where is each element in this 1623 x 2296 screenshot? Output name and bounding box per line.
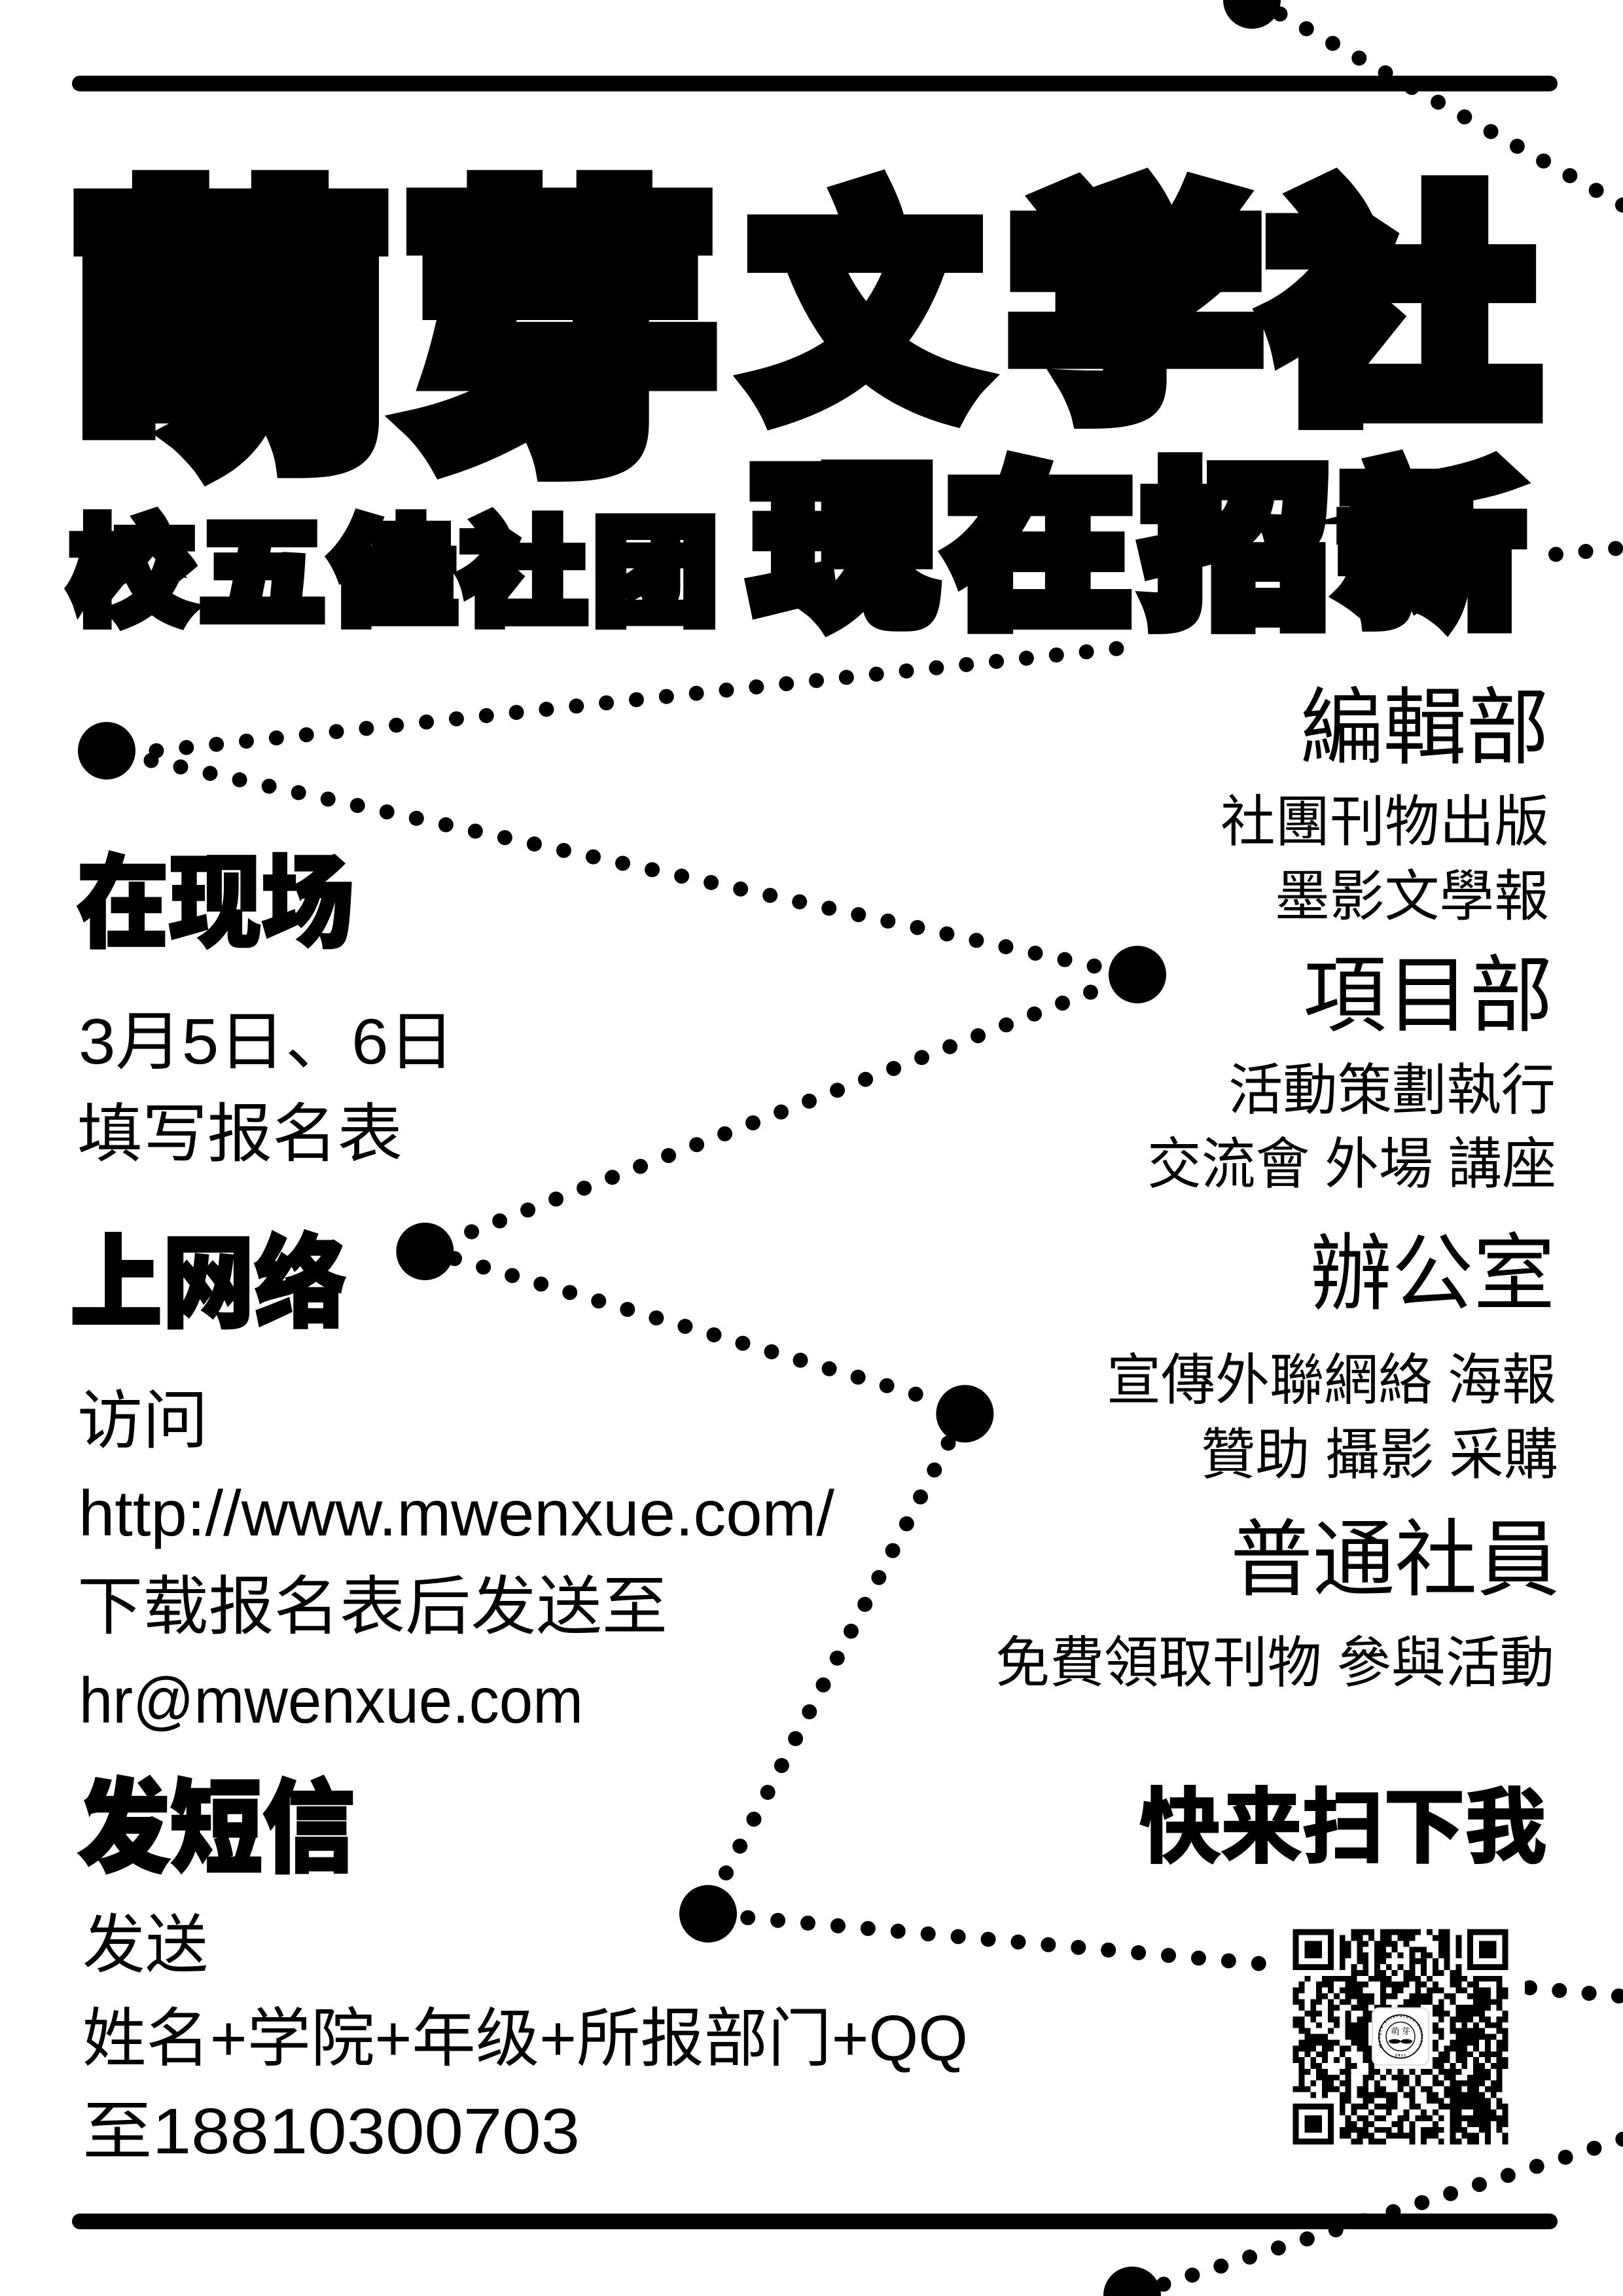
title: society name: 文 [749, 175, 980, 445]
panel: projects department [1147, 949, 1556, 1196]
node: bottom [1103, 2267, 1161, 2296]
bottom rule [80, 2214, 1550, 2229]
dotted connector: node C to node D [455, 1259, 916, 1394]
panel: office [1107, 1227, 1558, 1486]
text block: on-site details: 填写报名表 [77, 1098, 402, 1170]
subtitle: recruiting now: 在 [948, 452, 1132, 646]
dotted connector: node A to under title [156, 649, 1117, 751]
panel: ordinary members: 免費領取刊物 參與活動 [995, 1632, 1554, 1695]
top rule [80, 76, 1550, 92]
panel: editorial department: 墨影文學報 [1275, 866, 1549, 928]
text block: on-site details: 3月5日、6日 [79, 1005, 455, 1077]
subtitle: recruiting now [753, 452, 1523, 647]
node: B [1109, 946, 1166, 1003]
node: D [936, 1385, 993, 1443]
subtitle: top five club: 校 [70, 510, 193, 637]
subtitle: top five club: 团 [594, 509, 717, 637]
node: C [396, 1223, 454, 1280]
panel: editorial department: 編輯部 [1300, 681, 1549, 775]
panel: editorial department [1221, 681, 1549, 928]
dotted connector: node B to node C [471, 992, 1090, 1232]
text block: online details: hr@mwenxue.com [79, 1664, 583, 1736]
dotted connector: title to right edge [1556, 545, 1623, 554]
node: E [679, 1885, 737, 1943]
subtitle: top five club: 社 [461, 509, 586, 637]
title: society name: 芽 [405, 171, 715, 502]
panel: projects department: 活動策劃執行 [1228, 1060, 1556, 1122]
dotted connector: node E to QR code [748, 1918, 1259, 1964]
text block: online details: 下载报名表后发送至 [77, 1570, 668, 1642]
heading: scan me: 快来扫下我 [1139, 1782, 1546, 1873]
subtitle: top five club: 五 [200, 509, 325, 637]
title: society name: 社 [1268, 173, 1537, 447]
heading: on site: 在现场 [77, 847, 353, 960]
title: society name [73, 171, 1537, 502]
dotted connector: node A to node B [151, 761, 1095, 966]
QR code with seal logo: 2 0 1 1 [1395, 2054, 1406, 2058]
dotted connector: node D to node E [726, 1443, 948, 1874]
subtitle: recruiting now: 新 [1340, 452, 1523, 646]
node: top [1223, 0, 1281, 29]
dotted connector: QR code to right edge [1530, 1988, 1623, 1999]
node: A [78, 722, 135, 780]
title: society name: 萌 [73, 171, 389, 502]
title: society name: 学 [1008, 173, 1263, 447]
panel: ordinary members [995, 1513, 1560, 1695]
text block: online details [77, 1384, 835, 1736]
subtitle: top five club: 佳 [331, 509, 455, 637]
text block: text message details: 发送 [82, 1909, 208, 1981]
text block: on-site details [77, 1005, 455, 1170]
dotted connector: top node to right edge [1280, 14, 1623, 221]
text block: text message details [82, 1909, 968, 2167]
dotted connector: bottom node to right edge [1164, 2130, 1623, 2284]
panel: editorial department: 社團刊物出版 [1221, 791, 1549, 853]
text block: text message details: 至18810300703 [82, 2095, 580, 2167]
heading: online: 上网络 [70, 1227, 347, 1340]
text block: text message details: 姓名+学院+年级+所报部门+QQ [82, 2002, 968, 2074]
subtitle: top five club [70, 509, 717, 637]
panel: office: 辦公室 [1310, 1227, 1555, 1321]
subtitle: recruiting now: 招 [1143, 453, 1329, 647]
QR code with seal logo: 萌 芽 [1391, 2024, 1410, 2037]
subtitle: recruiting now: 现 [753, 452, 936, 646]
panel: ordinary members: 普通社員 [1230, 1513, 1560, 1607]
panel: projects department: 項目部 [1303, 949, 1553, 1043]
panel: office: 宣傳外聯網絡 海報 [1107, 1350, 1556, 1412]
QR code with seal logo: Mengya Literature Society [1378, 2015, 1424, 2049]
text block: online details: 访问 [77, 1384, 208, 1456]
panel: projects department: 交流會 外場 講座 [1147, 1134, 1556, 1196]
panel: office: 贊助 攝影 采購 [1201, 1424, 1558, 1486]
text block: online details: http://www.mwenxue.com/ [79, 1477, 835, 1549]
QR code with seal logo [1293, 1929, 1525, 2144]
heading: text message: 发短信 [78, 1772, 355, 1885]
